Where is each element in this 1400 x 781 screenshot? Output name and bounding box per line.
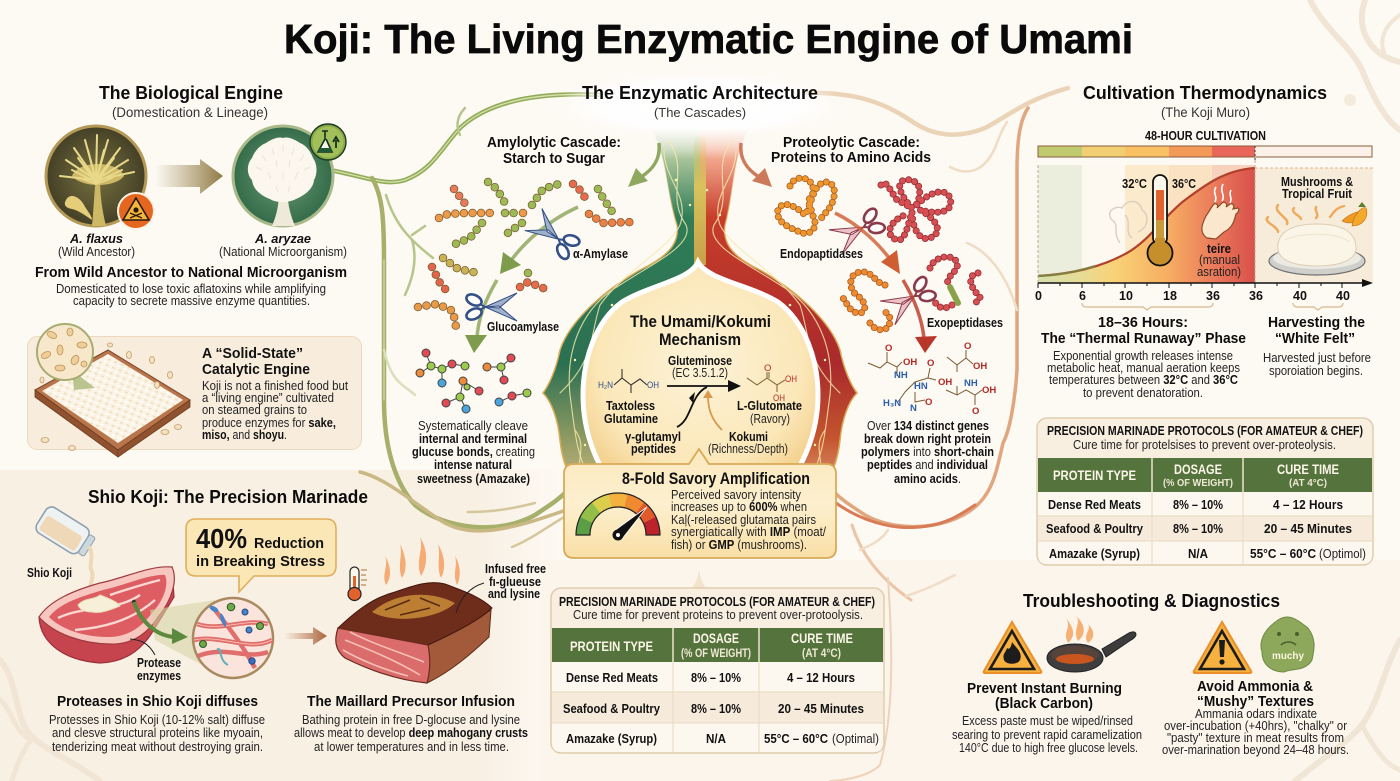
- brackets: [1082, 303, 1343, 310]
- text: avoid ammonia: “Mushy” Textures: [1197, 693, 1314, 710]
- icon: steam: [1110, 201, 1147, 243]
- diagram: amino acid structures: OH: [982, 385, 996, 396]
- lower backdrop: [540, 560, 1400, 781]
- band: green left: [543, 130, 700, 495]
- table: center precision marinade protocols: (Optimal): [832, 732, 879, 746]
- heading: Proteolytic Cascade:: [783, 134, 920, 151]
- table: right precision marinade protocols: (% OF WEIGHT): [1163, 477, 1233, 489]
- icon: endopeptidase scissors: [829, 204, 889, 255]
- peptide arrow: [677, 387, 707, 427]
- mechanism heading: The Umami/Kokumi: [630, 312, 771, 331]
- text: prevent burning: 140°C due to high free glucose levels.: [959, 741, 1138, 755]
- text: avoid ammonia: over-incubation (+40hrs), "chalky" or: [1164, 719, 1347, 733]
- enzyme label: [668, 354, 732, 380]
- diagram: starch chains: [418, 182, 633, 327]
- label: alpha-amylase: α-Amylase: [573, 247, 628, 261]
- label: kokumi: [708, 430, 788, 456]
- molecule: glutamate: O: [764, 363, 771, 374]
- arrow: glucoamylase step: [465, 280, 497, 353]
- diagram: amino acid structures: O: [925, 397, 932, 408]
- text: maillard: allows meat to develop deep mahogany crusts: [294, 726, 528, 740]
- label: glutamate: [737, 399, 802, 426]
- text: prevent burning: [952, 680, 1142, 755]
- text: proteolytic description: peptides and individual: [867, 458, 988, 472]
- table: center precision marinade protocols: (AT 4°C): [802, 648, 841, 660]
- icon: exclamation warning: [1194, 622, 1251, 673]
- callout: 40% reduction: [186, 519, 336, 592]
- heading: Troubleshooting & Diagnostics: [1023, 590, 1280, 611]
- label: peptides: peptides: [631, 442, 676, 456]
- label: aroma: [1281, 175, 1353, 201]
- icon: A. oryzae circle: [233, 126, 333, 226]
- icon: hazard badge: [118, 193, 154, 229]
- panel: proteolytic cascade: [771, 134, 1003, 486]
- label: endopeptidases: Endopaptidases: [780, 247, 863, 261]
- heading: Proteins to Amino Acids: [771, 149, 931, 166]
- axis: [1035, 279, 1373, 303]
- labels: temperature: 32°C: [1122, 177, 1147, 191]
- cone: zoom focus: [150, 600, 215, 672]
- callout body: Perceived savory intensity: [671, 488, 802, 502]
- table: center precision marinade protocols: [551, 588, 884, 753]
- panel text: a “living engine” cultivated: [202, 391, 334, 405]
- table: center precision marinade protocols: PROTEIN TYPE: [570, 639, 653, 654]
- arrow: lineage: [155, 159, 223, 194]
- table: center precision marinade protocols: Amazake (Syrup): [566, 731, 657, 746]
- icon: flask badge: [310, 124, 346, 160]
- callout body: Kaļ(-released glutamata pairs: [671, 513, 816, 527]
- icon: fire warning: [984, 622, 1041, 673]
- table: center precision marinade protocols: Cure time for prevent proteins to prevent over-protoolysis.: [573, 608, 863, 622]
- label: kokumi: Kokumi: [729, 430, 768, 444]
- heading glow: [555, 71, 845, 139]
- text: maillard: at lower temperatures and in less time.: [314, 740, 509, 754]
- callout: 40% reduction: 40%: [196, 523, 247, 554]
- arrow: amylase step: [500, 207, 578, 274]
- title: Koji: The Living Enzymatic Engine of Umami: [284, 16, 1133, 62]
- band: red right: [700, 130, 857, 495]
- table: right precision marinade protocols: 4 – 12 Hours: [1273, 497, 1343, 512]
- icon: heat flames: [384, 537, 460, 585]
- icon: glucoamylase scissors: [465, 292, 517, 322]
- table: right precision marinade protocols: 8% – 10%: [1173, 521, 1223, 536]
- label: teire: asration): [1197, 265, 1241, 279]
- text: avoid ammonia: "pasty" texture in meat results from: [1167, 731, 1344, 745]
- icon: tropical fruit: [1342, 202, 1367, 226]
- growth chart: [1035, 160, 1373, 303]
- label: aroma: Mushrooms &: [1281, 175, 1353, 189]
- label: glucoamylase: Glucoamylase: [487, 320, 559, 334]
- axis: 18: [1163, 289, 1177, 303]
- text: avoid ammonia: Avoid Ammonia &: [1197, 678, 1313, 695]
- heading: [99, 82, 283, 120]
- text: thermal runaway: metabolic heat, manual aeration keeps: [1047, 361, 1240, 375]
- panel text: A “Solid-State”: [202, 345, 303, 362]
- text: maillard: Bathing protein in free D-glocuse and lysine: [302, 713, 520, 727]
- label: infused free: and lysine: [488, 587, 540, 601]
- callout heading: 8-Fold Savory Amplification: [622, 469, 810, 488]
- label: kokumi: (Richness/Depth): [708, 442, 788, 456]
- icon: alpha-amylase scissors: [524, 208, 584, 263]
- heading: Shio Koji: The Precision Marinade: [88, 486, 368, 507]
- text: prevent burning: (Black Carbon): [995, 695, 1093, 712]
- axis: 36: [1206, 289, 1220, 303]
- table: center precision marinade protocols: 8% – 10%: [691, 701, 741, 716]
- text: harvesting: Harvesting the: [1268, 314, 1365, 331]
- panel: enzymatic architecture heading: The Enzymatic Architecture: [582, 82, 818, 103]
- table: center precision marinade protocols: PRECISION MARINADE PROTOCOLS (FOR AMATEUR & CHEF): [559, 595, 875, 609]
- diagram: amino acid structures: O: [964, 341, 971, 352]
- icon: gauge: [576, 493, 660, 540]
- mycelium veins: right network: [805, 88, 1068, 781]
- text: harvesting: Harvested just before: [1263, 351, 1371, 365]
- table: center precision marinade protocols: (% OF WEIGHT): [681, 648, 751, 660]
- table: right precision marinade protocols: Amazake (Syrup): [1049, 546, 1140, 561]
- icon: thermometer: [1148, 175, 1172, 266]
- label: teire: teire: [1207, 242, 1231, 256]
- icon: shio koji jar: [33, 504, 98, 590]
- text: thermal runaway: to prevent denatoration.: [1083, 386, 1203, 400]
- table: right precision marinade protocols: DOSAGE: [1174, 462, 1222, 477]
- axis: 40: [1293, 289, 1307, 303]
- label: infused free: Infused free: [485, 562, 546, 576]
- label: aroma: Tropical Fruit: [1282, 187, 1353, 201]
- icon: raw steak: [39, 567, 174, 663]
- diagram: amino acid structures: NH: [964, 378, 978, 389]
- icon: exopeptidase scissors: [880, 273, 940, 325]
- band seam: [694, 135, 706, 265]
- panel text: Koji is not a finished food but: [202, 379, 348, 393]
- callout body: [671, 488, 826, 552]
- text: proteases: [49, 693, 265, 754]
- heading: Starch to Sugar: [503, 150, 605, 167]
- molecule: glutamate: OH: [773, 393, 785, 404]
- text: prevent burning: Prevent Instant Burning: [967, 680, 1122, 697]
- text: proteolytic description: break down right protein: [864, 432, 991, 446]
- panel: biological engine: [35, 82, 347, 308]
- table: center precision marinade protocols: Seafood & Poultry: [563, 701, 661, 716]
- heading: Cultivation Thermodynamics: [1083, 82, 1327, 103]
- diagram: amino acid structures: HN: [914, 381, 928, 392]
- panel: solid-state catalytic engine: [28, 324, 362, 457]
- molecule: glutamate: OH: [785, 374, 797, 385]
- icon: hand aeration: [1202, 184, 1239, 239]
- axis: 10: [1119, 289, 1133, 303]
- panel: shio koji: [27, 486, 546, 754]
- label: glutamate: L-Glutomate: [737, 399, 802, 413]
- text: proteolytic description: polymers into short-chain: [861, 445, 994, 459]
- text: prevent burning: searing to prevent rapid caramelization: [952, 728, 1142, 742]
- text: amylolytic description: [412, 419, 535, 486]
- heading: (The Koji Muro): [1161, 105, 1250, 120]
- table: right precision marinade protocols: Dense Red Meats: [1048, 497, 1141, 512]
- panel text: produce enzymes for sake,: [202, 416, 336, 430]
- icon: white felt koji cake: [1269, 224, 1365, 275]
- label: teire: [1197, 242, 1241, 279]
- heading: [487, 134, 621, 167]
- text: proteases: Proteases in Shio Koji diffuses: [57, 693, 258, 710]
- labels: species: A. aryzae: [254, 231, 311, 246]
- arrow: into proteolytic cascade: [741, 143, 772, 187]
- labels: species: (Wild Ancestor): [58, 245, 135, 259]
- heading: [1083, 82, 1327, 120]
- kokumi arrow: [703, 390, 722, 430]
- icon: frying pan: [1047, 616, 1136, 672]
- icon: heat squiggles: [1267, 205, 1344, 232]
- text: proteases: tenderizing meat without destroying grain.: [52, 740, 263, 754]
- text: amylolytic description: intense natural: [434, 458, 512, 472]
- molecule: glutamine: OH: [647, 380, 659, 391]
- text: harvesting: [1263, 314, 1371, 378]
- reaction arrow: [667, 380, 741, 392]
- panel: troubleshooting: [952, 590, 1349, 757]
- table: center precision marinade protocols: CURE TIME: [791, 631, 853, 646]
- icon: muscle fibres magnified: [193, 598, 273, 678]
- callout body: increases up to 600% when: [671, 500, 807, 514]
- arrow: exopeptidase step: [903, 280, 937, 353]
- callout: 40% reduction: in Breaking Stress: [196, 553, 325, 570]
- panel: cultivation thermodynamics: [952, 82, 1373, 757]
- subheading and text: [35, 264, 347, 308]
- text: proteolytic description: Over 134 distinct genes: [867, 419, 989, 433]
- text: thermal runaway: The “Thermal Runaway” Phase: [1041, 330, 1246, 347]
- diagram: amino acid structures: H₃N: [883, 398, 901, 409]
- molecule: glutamine: H₂N: [598, 380, 613, 391]
- mechanism heading: Mechanism: [659, 330, 741, 349]
- diagram: amino acid structures: OH: [903, 357, 917, 368]
- subheading and text: From Wild Ancestor to National Microorganism: [35, 264, 347, 281]
- table: right precision marinade protocols: PROTEIN TYPE: [1053, 468, 1136, 483]
- subheading and text: Domesticated to lose toxic aflatoxins while amplifying: [56, 282, 326, 296]
- table: center precision marinade protocols: 20 – 45 Minutes: [778, 701, 864, 716]
- text: proteolytic description: [861, 419, 994, 486]
- arrow: to cooked meat: [284, 627, 327, 645]
- table: center precision marinade protocols: 55°C – 60°C: [764, 731, 829, 746]
- text: harvesting: “White Felt”: [1275, 330, 1355, 347]
- central mycelium band: [543, 130, 857, 495]
- text: proteolytic description: amino acids.: [894, 472, 961, 486]
- axis: 36: [1249, 289, 1263, 303]
- table: right precision marinade protocols: N/A: [1188, 546, 1209, 561]
- label: glutamate: (Ravory): [750, 412, 790, 426]
- label: peptides: γ-glutamyl: [625, 430, 681, 444]
- text: thermal runaway: [1041, 314, 1246, 400]
- molecule: glutamate: [747, 363, 797, 404]
- diagram: amino acid structures: NH: [894, 370, 908, 381]
- callout: 40% reduction: Reduction: [254, 535, 324, 552]
- subheading and text: capacity to secrete massive enzyme quantities.: [73, 294, 310, 308]
- labels: temperature: 36°C: [1172, 177, 1196, 191]
- label: exopeptidases: Exopeptidases: [927, 316, 1003, 330]
- icon: rice tray: [35, 324, 190, 457]
- icon: mushy blob: muchy: [1272, 650, 1304, 662]
- text: harvesting: sporoiation begins.: [1269, 364, 1363, 378]
- molecule: glutamine: [598, 369, 659, 393]
- diagram: amino acid structures: O: [885, 343, 892, 354]
- icon: seared meat: [336, 583, 492, 683]
- label: infused free: [456, 562, 546, 613]
- table: right precision marinade protocols: CURE TIME: [1277, 462, 1339, 477]
- text: avoid ammonia: [1162, 678, 1349, 757]
- panel backdrop: shio koji: [0, 470, 560, 781]
- table: right precision marinade protocols: 20 – 45 Minutes: [1264, 521, 1352, 536]
- label: protease enzymes: enzymes: [137, 669, 181, 683]
- label: glutamine: Glutamine: [604, 412, 658, 426]
- label: glutamine: [604, 399, 658, 426]
- diagram: amino acid structures: O: [927, 358, 934, 369]
- band strands: [560, 140, 840, 490]
- band sparkles: [574, 179, 826, 446]
- chart label: 48-HOUR CULTIVATION: [1145, 129, 1266, 143]
- table: right precision marinade protocols: 55°C – 60°C: [1250, 546, 1317, 561]
- panel: enzymatic architecture heading: [582, 82, 818, 120]
- diagram: amino acid structures: [868, 341, 996, 417]
- diagram: amino acid structures: N: [910, 403, 917, 414]
- text: amylolytic description: sweetness (Amazake): [417, 472, 530, 486]
- table: right precision marinade protocols: 8% – 10%: [1173, 497, 1223, 512]
- enzyme label: (EC 3.5.1.2): [672, 366, 728, 380]
- callout body: synergiatically with IMP (moat/: [671, 525, 826, 539]
- text: maillard: The Maillard Precursor Infusion: [307, 693, 515, 710]
- table: center precision marinade protocols: 4 – 12 Hours: [787, 670, 855, 685]
- diagram: glucose molecules: [416, 349, 531, 413]
- diagram: amino acid structures: OH: [938, 377, 952, 388]
- text: thermal runaway: temperatures between 32°C and 36°C: [1049, 373, 1238, 387]
- arrow: endopeptidase step: [835, 213, 900, 274]
- axis: 6: [1079, 289, 1086, 303]
- text: thermal runaway: 18–36 Hours:: [1098, 314, 1188, 331]
- mycelium veins: left green network: [330, 94, 600, 547]
- diagram: amino acid structures: O: [972, 406, 979, 417]
- label: infused free: fı-glueuse: [489, 575, 541, 589]
- diagram: folded proteins: [778, 178, 951, 240]
- panel text: [202, 345, 348, 442]
- table: right precision marinade protocols: (Optimol): [1319, 547, 1366, 561]
- icon: thermometer: [348, 567, 367, 600]
- table: right precision marinade protocols: [1037, 418, 1373, 565]
- label: peptides: [625, 430, 681, 456]
- text: avoid ammonia: Ammania odars indixate: [1195, 707, 1317, 721]
- text: amylolytic description: internal and terminal: [419, 432, 527, 446]
- table: center precision marinade protocols: N/A: [706, 731, 727, 746]
- diagram: amino acid structures: OH: [973, 361, 987, 372]
- text: proteases: and clesve structural proteins like myoain,: [52, 726, 263, 740]
- labels: species: [58, 231, 347, 259]
- enzyme label: Gluteminose: [668, 354, 732, 368]
- connector to table: [680, 570, 718, 597]
- heading: The Biological Engine: [99, 82, 283, 103]
- text: amylolytic description: Systematically cleave: [418, 419, 528, 433]
- diagram: protein fragments: [843, 257, 980, 330]
- table: right precision marinade protocols: Cure time for protelsises to prevent over-proteolysis.: [1073, 438, 1336, 452]
- text: amylolytic description: glucuse bonds, creating: [412, 445, 535, 459]
- panel text: miso, and shoyu.: [202, 428, 287, 442]
- icon: A. flavus circle: [46, 126, 146, 226]
- table: center precision marinade protocols: Dense Red Meats: [566, 670, 658, 685]
- panel: enzymatic architecture heading: (The Cascades): [654, 105, 746, 120]
- callout: 8-fold savory amplification: [564, 449, 836, 558]
- panel text: Catalytic Engine: [202, 361, 310, 378]
- timeline bar: [1038, 146, 1372, 160]
- heading: Amylolytic Cascade:: [487, 134, 621, 151]
- icon: mushy blob: [1261, 617, 1314, 672]
- arrow: into amylolytic cascade: [628, 143, 659, 187]
- heading: [771, 134, 931, 166]
- callout body: fish) or GMP (mushrooms).: [671, 538, 807, 552]
- panel: umami mechanism dome: [583, 262, 818, 492]
- text: proteases: Protesses in Shio Koji (10-12% salt) diffuse: [49, 713, 265, 727]
- table: right precision marinade protocols: (AT 4°C): [1289, 477, 1327, 489]
- labels: species: A. flaxus: [69, 231, 123, 246]
- table: right precision marinade protocols: Seafood & Poultry: [1046, 521, 1144, 536]
- text: maillard: [294, 693, 528, 754]
- text: avoid ammonia: over-marination beyond 24–48 hours.: [1162, 743, 1349, 757]
- mechanism heading: [630, 312, 771, 349]
- arrow: enzyme diffusion: [132, 600, 188, 644]
- panel: amylolytic cascade: [412, 134, 633, 486]
- axis: 0: [1035, 289, 1042, 303]
- axis: 40: [1336, 289, 1350, 303]
- table: center precision marinade protocols: DOSAGE: [693, 631, 739, 646]
- text: thermal runaway: Exponential growth releases intense: [1053, 349, 1233, 363]
- label: protease enzymes: Protease: [137, 656, 181, 670]
- labels: temperature: [1122, 177, 1196, 191]
- table: center precision marinade protocols: 8% – 10%: [691, 670, 741, 685]
- label: protease enzymes: [130, 639, 181, 683]
- label: shio koji: Shio Koji: [27, 566, 72, 580]
- text: prevent burning: Excess paste must be wiped/rinsed: [962, 714, 1133, 728]
- panel text: on steamed grains to: [202, 403, 307, 417]
- heading: (Domestication & Lineage): [112, 104, 268, 120]
- labels: species: (National Microorganism): [219, 245, 347, 259]
- label: teire: (manual: [1199, 253, 1240, 267]
- label: glutamine: Taxtoless: [606, 399, 655, 413]
